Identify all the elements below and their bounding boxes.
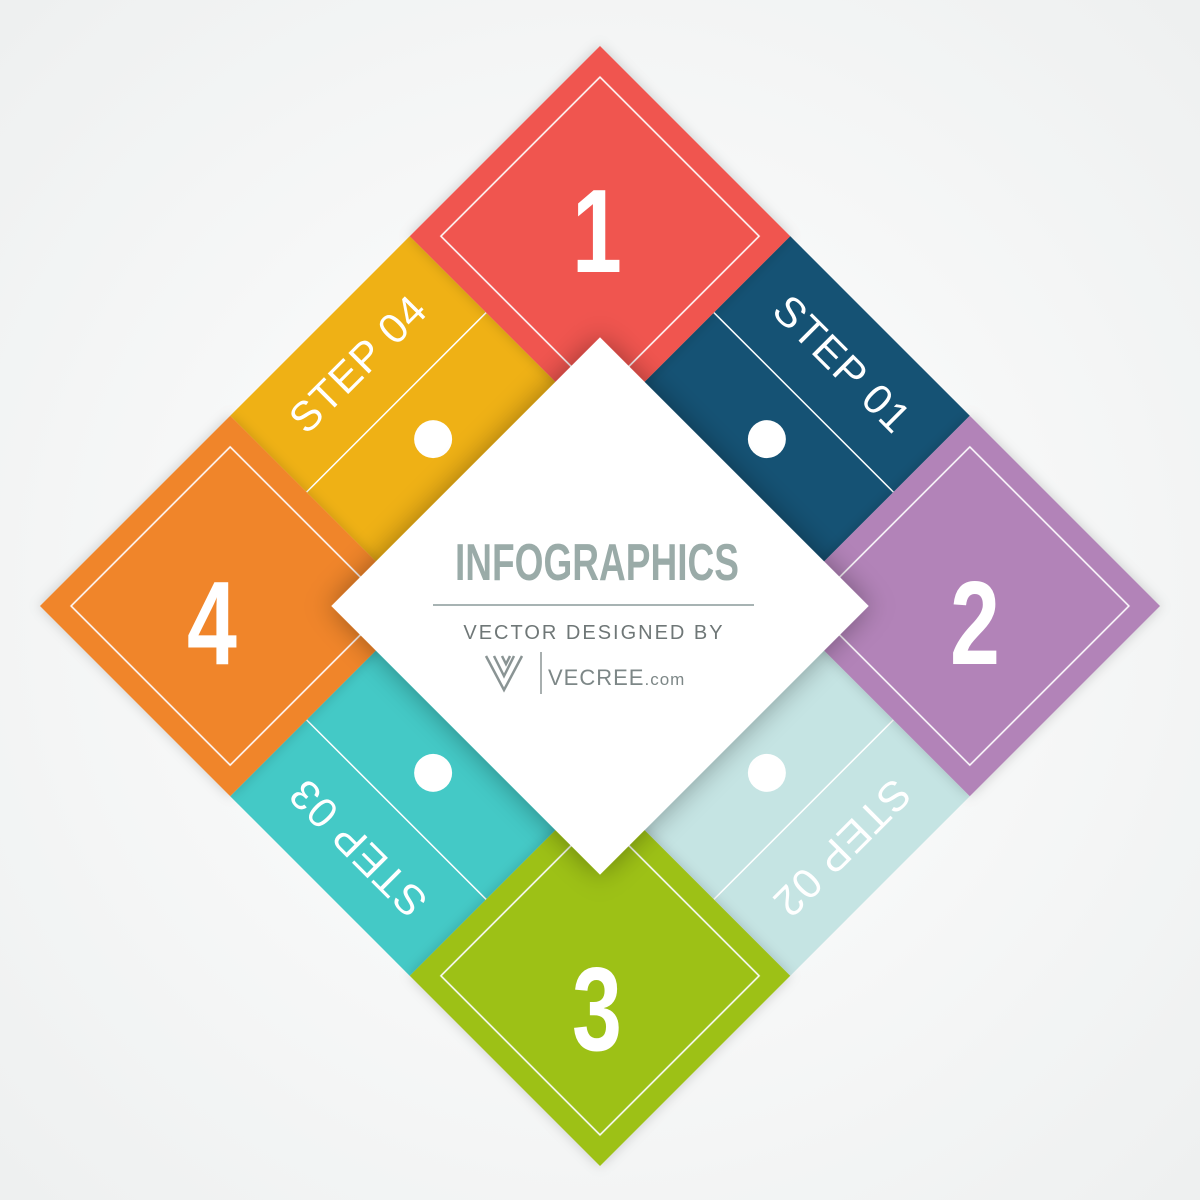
band: step 01: STEP 01: [764, 286, 920, 442]
number 2: 2: [950, 558, 1000, 690]
square 2 purple: [780, 416, 1160, 796]
center title block: INFOGRAPHICS: [455, 534, 739, 592]
square 1 red: [410, 46, 790, 426]
number 3: 3: [572, 944, 622, 1076]
band: step 02: [600, 606, 970, 976]
center white panel: [331, 337, 869, 875]
logo: vecree: VECREE.com: [548, 665, 685, 690]
square 4 orange: [40, 416, 420, 796]
center title block: VECTOR DESIGNED BY: [463, 622, 725, 644]
number 4: 4: [187, 558, 237, 690]
number 1: 1: [572, 166, 622, 298]
band: step 01: [600, 236, 970, 606]
center title block: [433, 534, 754, 644]
band: step 03: [230, 606, 600, 976]
band: step 04: STEP 04: [280, 286, 436, 442]
band: step 04: [230, 236, 600, 606]
square 3 green: [410, 786, 790, 1166]
logo: vecree: [486, 652, 685, 694]
band: step 02: STEP 02: [764, 770, 920, 926]
band: step 03: STEP 03: [280, 770, 436, 926]
